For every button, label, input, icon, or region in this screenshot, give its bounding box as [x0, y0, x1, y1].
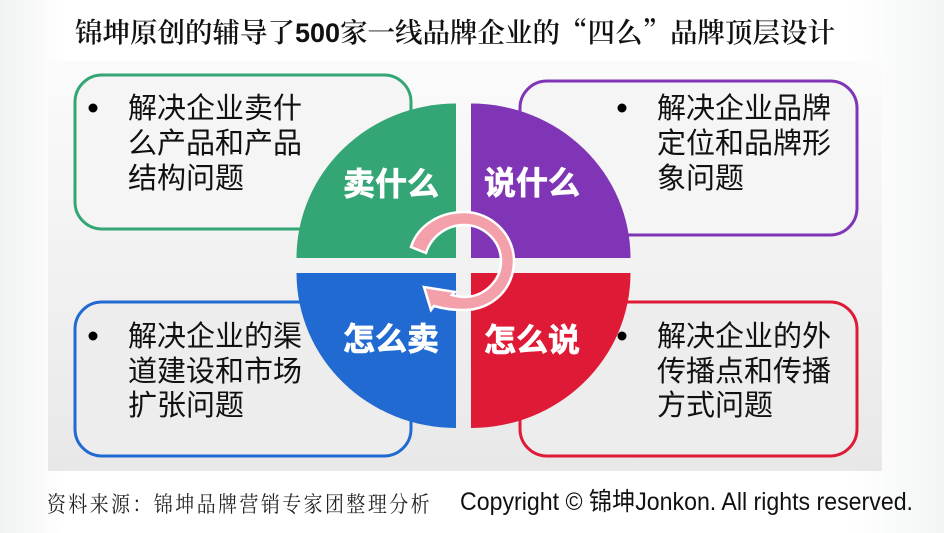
panel: 说什么 description — [520, 81, 857, 235]
panel: 卖什么 description — [75, 75, 411, 229]
panel: 怎么卖 description: 道建设和市场 — [128, 355, 302, 388]
arrow: clockwise cycle — [411, 212, 514, 310]
label: 说什么: 说什么 — [484, 165, 580, 201]
panel: 怎么说 description — [520, 302, 857, 456]
copyright: Copyright © 锦坤Jonkon. All rights reserved. — [460, 488, 913, 516]
panel: background — [48, 61, 882, 471]
chart: four-quadrant circle — [296, 104, 630, 428]
panel: 卖什么 description: 么产品和产品 — [128, 127, 302, 160]
panel: 说什么 description: 解决企业品牌 — [657, 92, 831, 125]
label: 卖什么: 卖什么 — [343, 166, 439, 202]
panel: 怎么说 description: 解决企业的外 — [657, 320, 831, 353]
quadrant: 怎么说 — [471, 273, 630, 428]
title: 锦坤原创的辅导了500家一线品牌企业的“四么”品牌顶层设计 — [75, 10, 835, 50]
panel: 说什么 description: 象问题 — [657, 162, 744, 195]
panel: 怎么卖 description — [75, 302, 411, 456]
quadrant: 说什么 — [471, 104, 630, 258]
panel: 怎么卖 description: 扩张问题 — [128, 389, 244, 422]
panel: 说什么 description: 定位和品牌形 — [657, 127, 831, 160]
panel: 怎么说 description: 方式问题 — [657, 389, 773, 422]
panel: 卖什么 description: 解决企业卖什 — [128, 92, 302, 125]
label: 怎么卖: 怎么卖 — [343, 321, 439, 357]
label: 怎么说: 怎么说 — [484, 322, 580, 358]
panel: 怎么说 description: 传播点和传播 — [657, 355, 831, 388]
source note: 资料来源：锦坤品牌营销专家团整理分析 — [47, 486, 430, 518]
quadrant: 怎么卖 — [296, 273, 456, 428]
panel: 卖什么 description: 结构问题 — [128, 162, 244, 195]
panel: 怎么卖 description: 解决企业的渠 — [128, 320, 302, 353]
quadrant: 卖什么 — [296, 104, 456, 258]
